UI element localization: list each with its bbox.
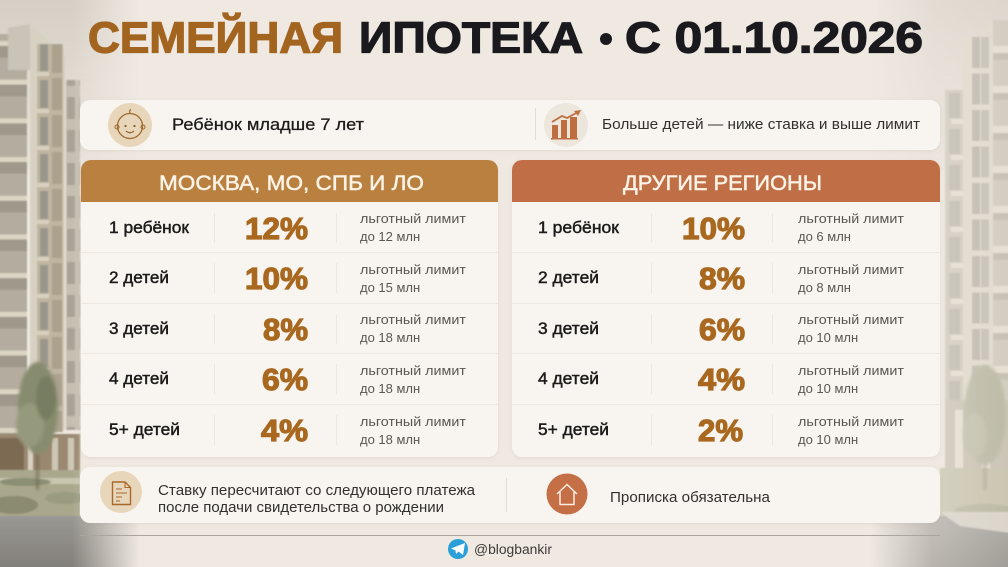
row: 4 children Moscow: льготный лимит bbox=[360, 363, 466, 378]
row: 4 children regions: льготный лимит bbox=[798, 363, 904, 378]
row: 5+ children regions: 2% bbox=[698, 413, 743, 448]
panel: other regions bbox=[512, 160, 940, 457]
row: 5+ children Moscow: 5+ детей bbox=[109, 421, 180, 439]
row: 2 children regions: льготный лимит bbox=[798, 262, 904, 277]
icon: growth chart bbox=[544, 103, 588, 147]
title: ИПОТЕКА bbox=[359, 14, 583, 62]
row: 2 children regions: 8% bbox=[699, 261, 745, 296]
text: rate recalculation: Ставку пересчитают со следующего платежа bbox=[158, 483, 476, 499]
footer: telegram handle: @blogbankir bbox=[474, 542, 553, 557]
tree right bbox=[963, 365, 1006, 490]
row: 3 children regions: льготный лимит bbox=[798, 312, 904, 327]
text: more children: Больше детей — ниже ставка и выше лимит bbox=[602, 117, 920, 133]
panel header: Moscow: МОСКВА, МО, СПБ И ЛО bbox=[159, 172, 424, 195]
icon: house bbox=[546, 474, 588, 514]
title: С 01.10.2026 bbox=[625, 14, 923, 62]
row: 3 children Moscow: льготный лимит bbox=[360, 312, 466, 327]
row: 4 children Moscow: 4 детей bbox=[109, 370, 169, 388]
row: 4 children Moscow bbox=[109, 362, 466, 397]
title bbox=[88, 12, 923, 62]
title: СЕМЕЙНАЯ bbox=[88, 12, 343, 62]
row: 1 child Moscow: льготный лимит bbox=[360, 211, 466, 226]
row: 5+ children Moscow bbox=[109, 413, 466, 448]
row: 1 child Moscow bbox=[109, 211, 466, 246]
row: 2 children Moscow: льготный лимит bbox=[360, 262, 466, 277]
row: 3 children regions bbox=[538, 312, 904, 347]
bottom notes bar: после подачи свидетельства о рождении bbox=[158, 500, 444, 516]
row: 4 children Moscow: до 18 млн bbox=[360, 381, 420, 396]
panel header: Moscow bbox=[81, 160, 498, 202]
row: 1 child Moscow: до 12 млн bbox=[360, 229, 420, 244]
row: 1 child Moscow: 1 ребёнок bbox=[109, 219, 190, 237]
row: 2 children regions: до 8 млн bbox=[798, 280, 851, 295]
row: 3 children regions: 6% bbox=[699, 312, 745, 347]
row: 5+ children Moscow: до 18 млн bbox=[360, 432, 420, 447]
row: 2 children regions: 2 детей bbox=[538, 269, 599, 287]
panel header: other regions bbox=[512, 160, 940, 202]
row: 4 children regions: 4% bbox=[698, 362, 745, 397]
row: 1 child regions: до 6 млн bbox=[798, 229, 851, 244]
text: child age condition: Ребёнок младше 7 лет bbox=[172, 116, 364, 134]
row: 4 children regions: 4 детей bbox=[538, 370, 599, 388]
icon: baby face bbox=[108, 103, 152, 147]
row: 3 children Moscow bbox=[109, 312, 466, 347]
row: 3 children regions: 3 детей bbox=[538, 320, 599, 338]
text: registration required: Прописка обязательна bbox=[610, 490, 771, 506]
panel: Moscow, MO, SPb, LO bbox=[81, 160, 498, 457]
row: 5+ children regions: до 10 млн bbox=[798, 432, 858, 447]
row: 5+ children regions: льготный лимит bbox=[798, 414, 904, 429]
row: 2 children Moscow bbox=[109, 261, 466, 296]
row: 2 children Moscow: 2 детей bbox=[109, 269, 169, 287]
row: 3 children Moscow: 3 детей bbox=[109, 320, 169, 338]
row: 1 child Moscow: 12% bbox=[245, 211, 308, 246]
row: 1 child regions: льготный лимит bbox=[798, 211, 904, 226]
row: 3 children Moscow: до 18 млн bbox=[360, 330, 420, 345]
row: 4 children regions bbox=[538, 362, 904, 397]
row: 1 child regions: 10% bbox=[682, 211, 745, 246]
row: 5+ children regions: 5+ детей bbox=[538, 421, 609, 439]
row: 5+ children Moscow: 4% bbox=[261, 413, 308, 448]
row: 5+ children Moscow: льготный лимит bbox=[360, 414, 466, 429]
row: 4 children Moscow: 6% bbox=[262, 362, 308, 397]
row: 4 children regions: до 10 млн bbox=[798, 381, 858, 396]
bottom notes bar bbox=[80, 467, 940, 523]
row: 2 children Moscow: 10% bbox=[245, 261, 308, 296]
panel header: other regions: ДРУГИЕ РЕГИОНЫ bbox=[623, 172, 822, 195]
row: 2 children regions bbox=[538, 261, 904, 296]
row: 1 child regions bbox=[538, 211, 904, 246]
footer: telegram handle bbox=[448, 539, 553, 559]
row: 1 child regions: 1 ребёнок bbox=[538, 219, 620, 237]
row: 5+ children regions bbox=[538, 413, 904, 448]
icon: document bbox=[100, 471, 142, 513]
row: 3 children regions: до 10 млн bbox=[798, 330, 858, 345]
row: 2 children Moscow: до 15 млн bbox=[360, 280, 420, 295]
tree left bbox=[16, 362, 58, 490]
row: 3 children Moscow: 8% bbox=[263, 312, 308, 347]
icon: telegram bbox=[448, 539, 468, 559]
top info bar bbox=[80, 100, 940, 150]
